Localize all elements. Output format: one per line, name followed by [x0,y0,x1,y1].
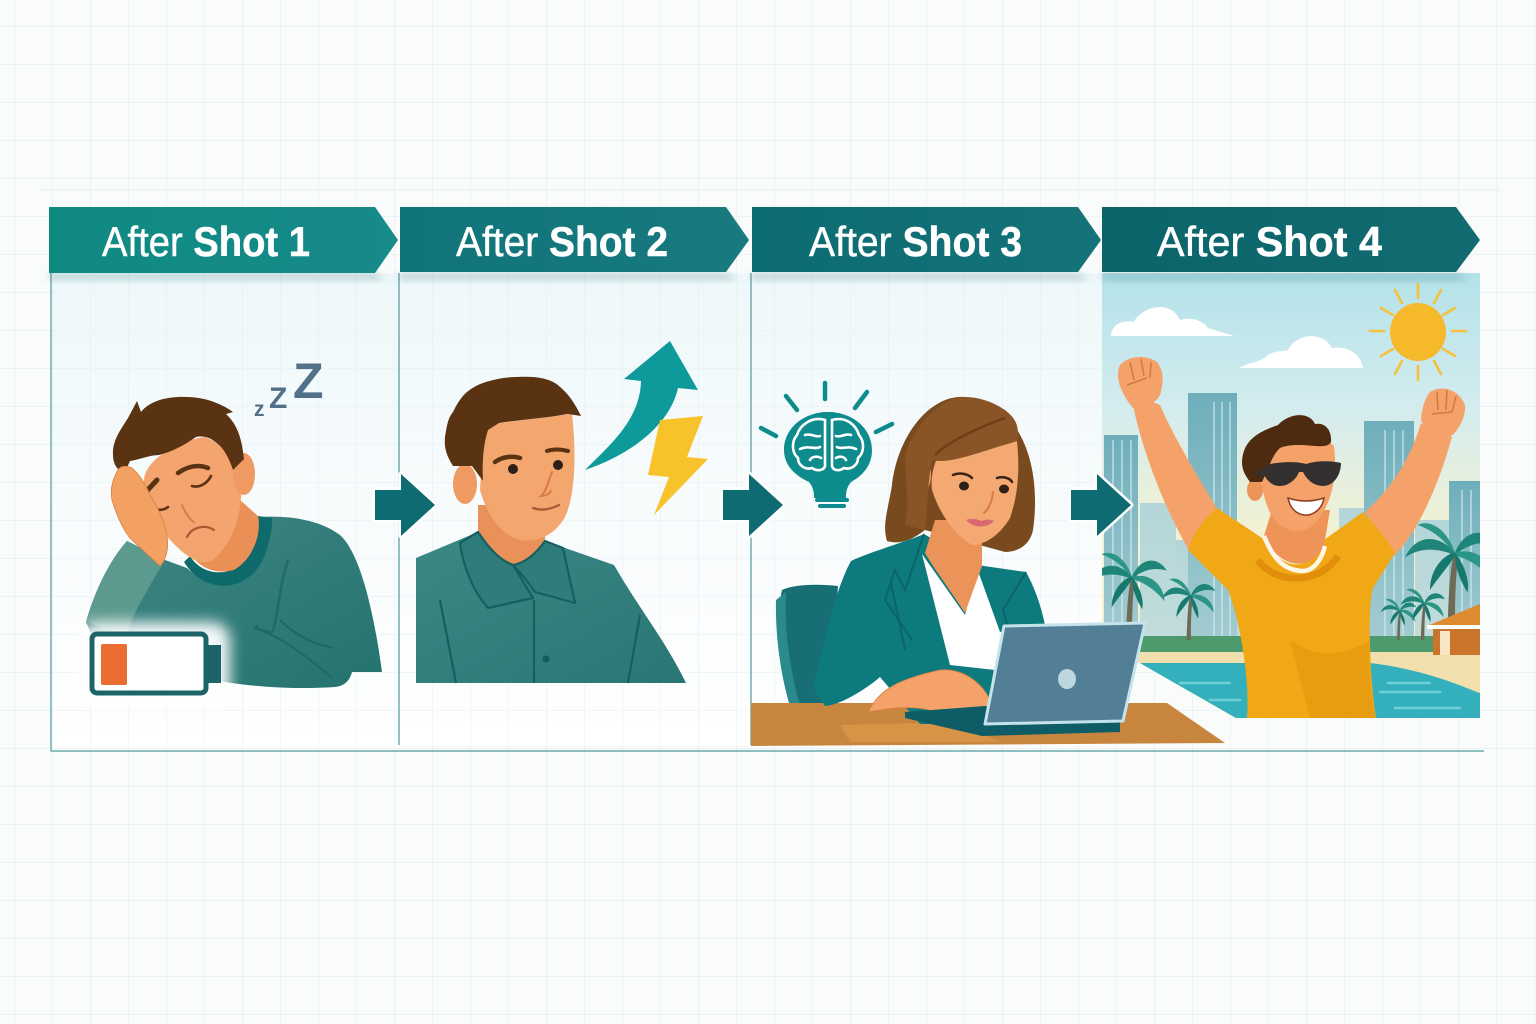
icon: sleep zzz: z [254,398,264,421]
icon: cloud left [1111,307,1234,336]
hair [445,377,581,481]
icon: low battery [80,622,230,704]
icon: lightning bolt [648,416,708,515]
ear [453,464,477,504]
face [932,441,1018,545]
heading: After Shot 2: After Shot 2 [456,218,668,265]
city skyline [1104,393,1480,645]
panel 3 illustration: woman at laptop [751,397,1225,746]
celebrating man [1118,357,1465,718]
icon: sleep zzz: Z [293,353,324,409]
face features [495,450,568,510]
ear [911,456,931,494]
icon: sun [1370,284,1466,380]
icon: rising arrow [585,341,698,470]
heading: After Shot 3: After Shot 3 [809,218,1022,265]
panel: after shot 2 background [399,273,751,745]
forearm and hand [868,670,992,722]
panel: after shot 3 background [751,273,1102,745]
left fist [1118,357,1163,408]
shirt collar [1264,536,1325,571]
laptop screen [985,623,1145,724]
face features [143,466,214,537]
jacket [813,534,1045,724]
smile [1288,498,1324,515]
neck [925,520,982,613]
collar [184,516,272,586]
palm trees [1091,523,1498,640]
arrow: shot 2 to shot 3 [723,474,783,536]
panel: after shot 4 beach scene [1091,273,1498,722]
neck [478,505,545,565]
white blouse [922,554,1000,670]
neck [195,500,259,572]
sleeve lighter [86,541,165,635]
ear [233,453,255,495]
heading: After Shot 2 [400,207,749,272]
head [144,437,241,562]
laptop base [905,706,1120,736]
icon: sleep zzz [254,353,324,421]
arrow: shot 1 to shot 2 [375,474,435,536]
face features [953,474,1012,513]
heading: After Shot 1: After Shot 1 [102,218,310,265]
water [1140,663,1480,718]
panel 1 illustration: tired man [86,397,382,688]
header shadows [49,273,1470,280]
laptop logo [1058,669,1076,689]
ground and sand [1138,636,1480,718]
yellow t-shirt [1188,508,1395,718]
panel: after shot 1 background [51,273,399,751]
arrow: shot 3 to shot 4 [1071,474,1131,536]
hair [1242,415,1331,482]
shirt collar [460,532,575,608]
hair back [885,397,1035,552]
desk [751,703,1225,746]
icon: brain lightbulb [761,383,892,508]
chair [780,585,838,706]
teal shirt [416,532,686,683]
hair [113,397,244,474]
face [480,414,574,541]
panel 2 illustration: man feeling better [416,377,686,683]
sweater [86,517,382,688]
right arm raised [1365,423,1452,556]
heading: After Shot 4: After Shot 4 [1157,218,1383,265]
icon: sleep zzz: Z [269,382,287,415]
heading: After Shot 1 [49,207,398,273]
right fist [1421,388,1465,438]
icon: cloud right [1239,336,1363,368]
neck [1264,510,1330,564]
hair front [905,397,1018,530]
ear [1247,479,1263,501]
heading: After Shot 3 [752,207,1101,272]
heading: After Shot 4 [1102,207,1480,272]
sunglasses [1256,461,1341,486]
icon: beach hut [1427,604,1480,655]
hand on cheek [111,466,168,566]
left arm raised [1133,402,1218,550]
head [1260,437,1335,531]
